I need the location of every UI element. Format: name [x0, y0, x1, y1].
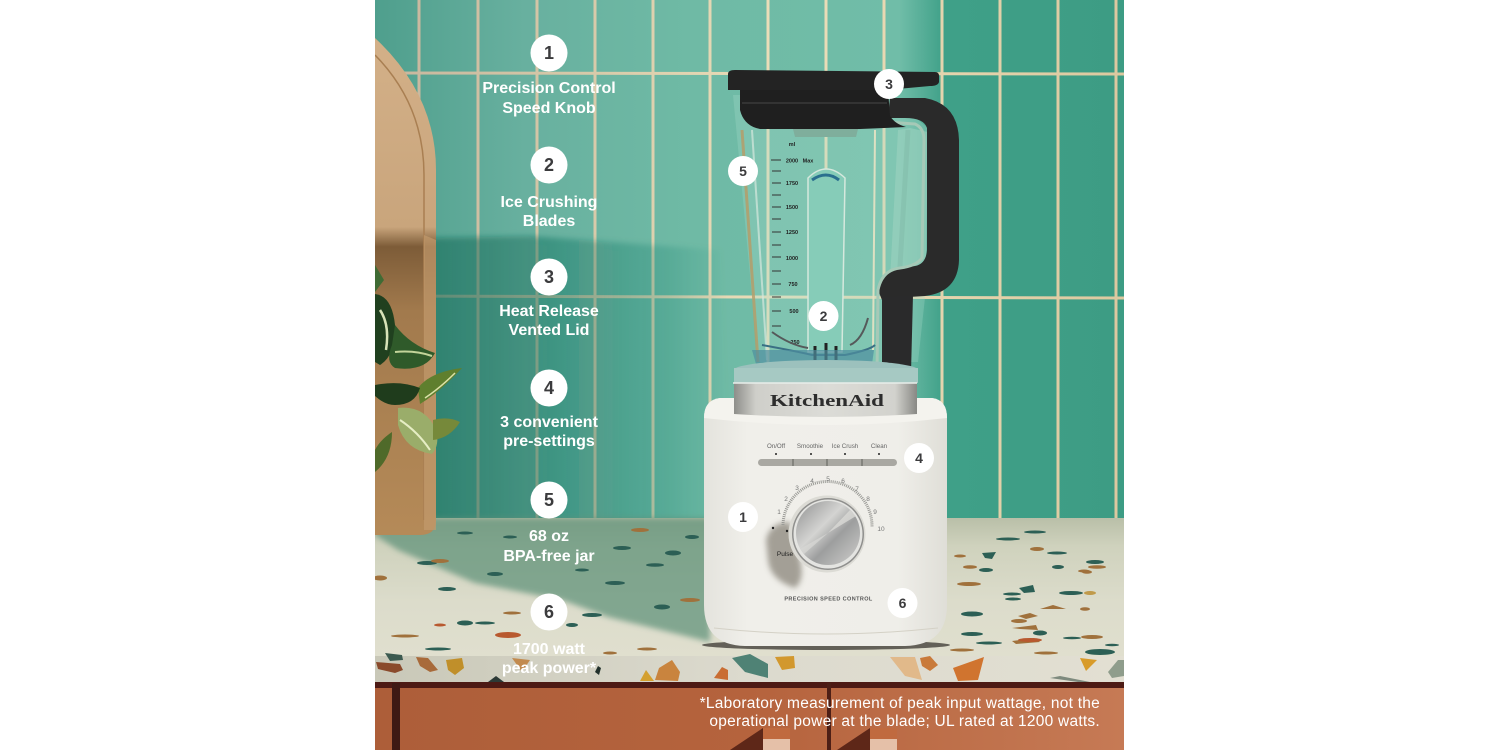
jar base collar and steel band [733, 360, 918, 417]
jar scale: 1000 [786, 256, 798, 262]
feature 2 [501, 146, 597, 230]
counter edge band [375, 656, 1124, 683]
jar scale: 1500 [786, 205, 798, 211]
feature 4 [500, 370, 599, 450]
badge 5: 5 [739, 163, 747, 179]
badge 1: 1 [739, 509, 747, 525]
badge 3 [874, 69, 904, 99]
badge 2 [808, 301, 838, 331]
jar scale [771, 142, 814, 346]
wooden cutting board [375, 38, 436, 535]
footnote: *Laboratory measurement of peak input wattage, not the [700, 695, 1100, 712]
blades [762, 318, 875, 362]
feature 4: 3 convenient [500, 414, 599, 431]
badge 2: 2 [820, 308, 828, 324]
badge 4: 4 [915, 450, 923, 466]
motor base [704, 398, 947, 646]
feature 1: 1 [544, 43, 554, 63]
speed dial: 7 [855, 486, 859, 493]
cabinets [375, 682, 1124, 750]
jar [733, 95, 928, 364]
feature 3: Heat Release [499, 303, 599, 320]
footnote [700, 695, 1100, 730]
feature 5: 68 oz [529, 528, 569, 545]
feature 4: 4 [544, 378, 554, 398]
speed dial: 5 [826, 476, 830, 483]
feature 3: 3 [544, 267, 554, 287]
blender [702, 70, 959, 650]
feature 5: BPA-free jar [503, 548, 595, 565]
badge 4 [904, 443, 934, 473]
badge 6 [888, 588, 918, 618]
blender callout badges [728, 69, 934, 618]
model text: PRECISION SPEED CONTROL [784, 596, 873, 602]
preset buttons [758, 459, 897, 466]
feature 3 [499, 258, 599, 339]
feature 5 [503, 482, 595, 565]
tan and brown chips [373, 528, 1106, 654]
plant [375, 265, 462, 472]
dark green chips [417, 530, 1119, 655]
speed dial: 2 [784, 496, 788, 503]
footnote: operational power at the blade; UL rated at 1200 watts. [709, 713, 1100, 730]
feature 1: Speed Knob [502, 100, 596, 117]
speed dial [766, 476, 885, 588]
feature 6: 1700 watt [513, 641, 586, 658]
feature 2: 2 [544, 155, 554, 175]
orange chips [434, 624, 1042, 642]
control labels: Smoothie [797, 443, 824, 450]
lid [728, 70, 939, 137]
speed dial: 1 [777, 509, 781, 516]
feature list [482, 34, 616, 677]
jar scale: Max [803, 158, 814, 164]
feature 1: Precision Control [482, 80, 616, 97]
speed dial: 10 [877, 526, 885, 533]
control labels: On/Off [767, 443, 785, 450]
feature 1 [482, 34, 616, 117]
jar scale: 750 [788, 282, 798, 288]
handle [877, 98, 959, 373]
edge chips [376, 653, 1124, 682]
badge 1 [728, 502, 758, 532]
badge 3: 3 [885, 76, 893, 92]
brand name: KitchenAid [770, 391, 885, 410]
speed dial: 8 [866, 496, 870, 503]
jar scale: 2000 [786, 158, 798, 164]
feature 6: peak power* [502, 660, 597, 677]
control labels: Ice Crush [832, 443, 859, 450]
control labels [767, 443, 888, 455]
jar scale: 1250 [786, 230, 798, 236]
jar scale: 1750 [786, 181, 798, 187]
jar inner column [808, 169, 845, 352]
control labels: Clean [871, 443, 888, 450]
feature 2: Ice Crushing [501, 194, 597, 211]
background photo scene [373, 0, 1124, 750]
speed dial: 4 [810, 478, 814, 485]
speed dial: 9 [873, 509, 877, 516]
speed dial: 3 [795, 485, 799, 492]
feature 2: Blades [523, 213, 575, 230]
speed dial: Pulse [777, 551, 794, 558]
jar scale: ml [789, 142, 796, 148]
badge 5 [728, 156, 758, 186]
badge 6: 6 [899, 595, 907, 611]
terrazzo counter [373, 518, 1124, 683]
feature 6: 6 [544, 602, 554, 622]
jar scale: 500 [789, 309, 799, 315]
speed dial: 6 [841, 478, 845, 485]
feature 6 [502, 594, 597, 677]
base shadow [702, 640, 950, 650]
feature 3: Vented Lid [509, 322, 589, 339]
feature 4: pre-settings [503, 433, 595, 450]
tiled wall [375, 0, 1124, 525]
feature 5: 5 [544, 490, 554, 510]
jar scale: 250 [790, 340, 800, 346]
water in jar base [752, 350, 874, 364]
